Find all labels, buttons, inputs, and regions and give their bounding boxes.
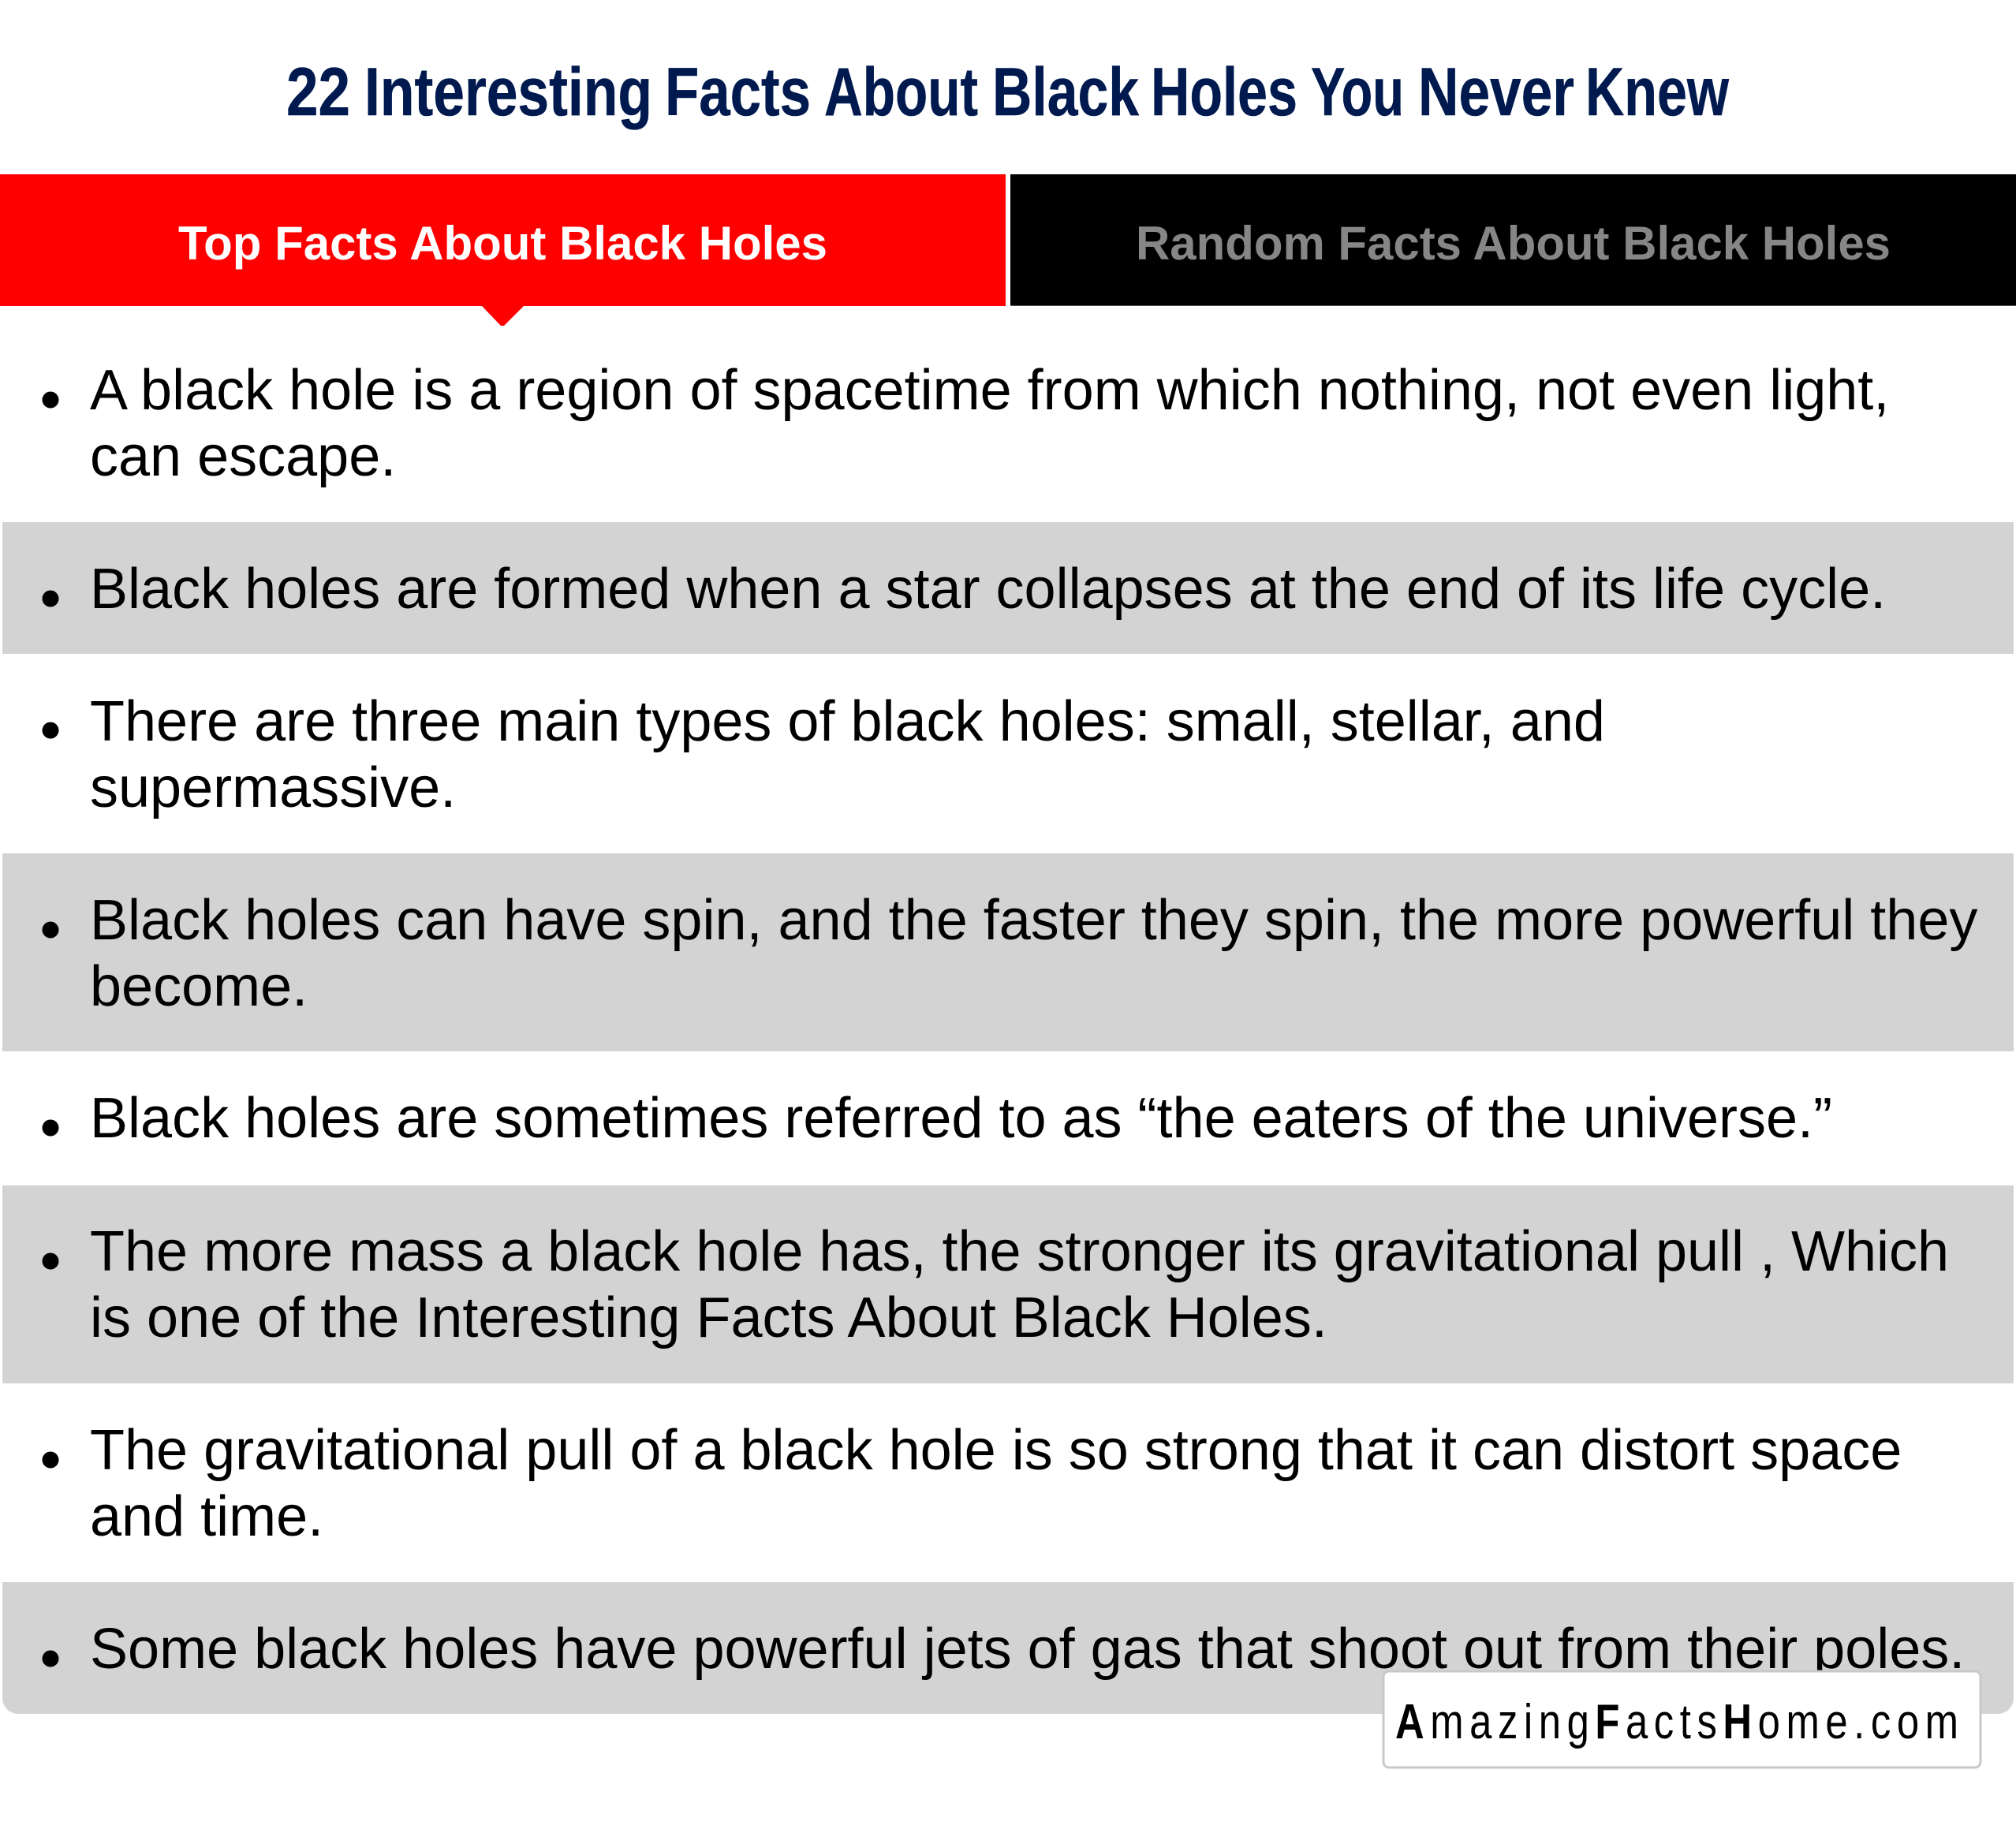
title: Facts [665, 54, 811, 130]
title: Interesting [364, 54, 652, 130]
fact 4 [2, 853, 2014, 1051]
fact 2: Black holes are formed when a star collapses at the end of its life cycle. [90, 558, 1886, 621]
title: You [1311, 54, 1404, 130]
tab: random facts (inactive) [1010, 174, 2016, 306]
title [286, 54, 1730, 130]
fact 6: is one of the Interesting Facts About Black Holes. [90, 1286, 1327, 1349]
fact 3: supermassive. [90, 756, 456, 819]
fact 7: The gravitational pull of a black hole is so strong that it can distort space [90, 1419, 1902, 1482]
title: Black [992, 54, 1139, 130]
fact 4: Black holes can have spin, and the faster they spin, the more powerful they [90, 889, 1977, 952]
title: 22 [286, 54, 350, 130]
fact 7: and time. [90, 1485, 323, 1548]
fact 3: There are three main types of black holes: small, stellar, and [90, 690, 1605, 753]
watermark badge: AmazingFactsHome.com [1395, 1695, 1965, 1749]
fact 1: can escape. [90, 425, 396, 488]
title: Knew [1585, 54, 1730, 130]
fact 8: Some black holes have powerful jets of gas that shoot out from their poles. [90, 1618, 1965, 1681]
fact 6 [2, 1185, 2014, 1383]
tab: top facts (active): Top Facts About Black Holes [178, 217, 827, 270]
title: Holes [1151, 54, 1297, 130]
title: About [824, 54, 978, 130]
fact 5: Black holes are sometimes referred to as “the eaters of the universe.” [90, 1087, 1832, 1150]
fact 7 [43, 1419, 1902, 1548]
tab: random facts (inactive): Random Facts About Black Holes [1136, 217, 1891, 270]
title: Never [1418, 54, 1574, 130]
fact 1: A black hole is a region of spacetime from which nothing, not even light, [90, 359, 1889, 422]
fact 6: The more mass a black hole has, the stronger its gravitational pull , Which [90, 1220, 1949, 1283]
tab: top facts (active) [0, 174, 1006, 326]
fact 3 [43, 690, 1605, 819]
watermark badge [1383, 1671, 1981, 1767]
fact 8 [2, 1582, 2014, 1714]
fact 2 [2, 522, 2014, 654]
fact 4: become. [90, 955, 308, 1018]
fact 1 [43, 359, 1889, 488]
